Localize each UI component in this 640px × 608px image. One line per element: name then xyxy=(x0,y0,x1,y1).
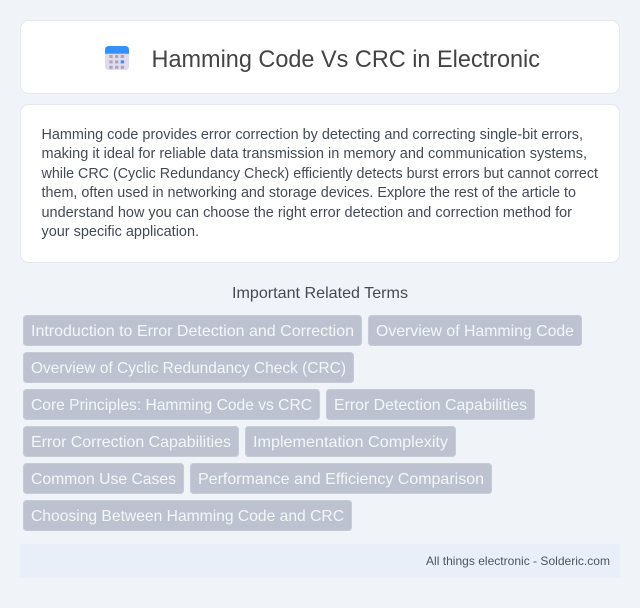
panel: header xyxy=(20,20,620,94)
chip xyxy=(326,390,534,420)
chip: Overview of Cyclic Redundancy Check (CRC) xyxy=(31,360,346,377)
chip xyxy=(246,426,456,456)
chip xyxy=(24,316,362,346)
chip: Performance and Efficiency Comparison xyxy=(198,471,484,488)
text block: summary paragraph: your specific application. xyxy=(42,224,199,240)
text block: summary paragraph: understand how you can choose the right error detection and correction method for xyxy=(42,205,572,221)
panel: related term chips xyxy=(24,316,582,530)
chip xyxy=(368,316,582,346)
chip xyxy=(24,500,352,530)
text block: summary paragraph: Hamming code provides error correction by detecting and correcting single-bit errors, xyxy=(42,127,583,143)
title: Hamming Code Vs CRC in Electronic xyxy=(152,46,540,73)
text block: summary paragraph: them, often used in networking and storage devices. Explore the rest of the article to xyxy=(42,185,576,201)
footer xyxy=(20,544,620,578)
text block: summary paragraph: making it ideal for reliable data transmission in memory and communication systems, xyxy=(42,146,587,162)
text block: summary paragraph: while CRC (Cyclic Redundancy Check) efficiently detects burst errors but cannot correct xyxy=(41,166,598,182)
chip xyxy=(24,426,238,456)
chip: Core Principles: Hamming Code vs CRC xyxy=(31,397,312,414)
heading: related terms: Important Related Terms xyxy=(232,285,408,302)
chip: Overview of Hamming Code xyxy=(376,323,574,340)
icon: calculator xyxy=(105,46,129,70)
text block: summary paragraph xyxy=(41,127,598,240)
chip xyxy=(24,464,184,494)
chip: Choosing Between Hamming Code and CRC xyxy=(31,508,344,525)
chip: Implementation Complexity xyxy=(253,434,448,451)
chip xyxy=(24,352,354,382)
chip xyxy=(24,390,320,420)
chip: Common Use Cases xyxy=(31,471,176,488)
chip: Introduction to Error Detection and Correction xyxy=(31,323,354,340)
footer: All things electronic - Solderic.com xyxy=(426,554,610,568)
chip: Error Correction Capabilities xyxy=(31,434,231,451)
chip: Error Detection Capabilities xyxy=(334,397,527,414)
chip xyxy=(190,464,492,494)
panel: summary xyxy=(20,104,620,262)
